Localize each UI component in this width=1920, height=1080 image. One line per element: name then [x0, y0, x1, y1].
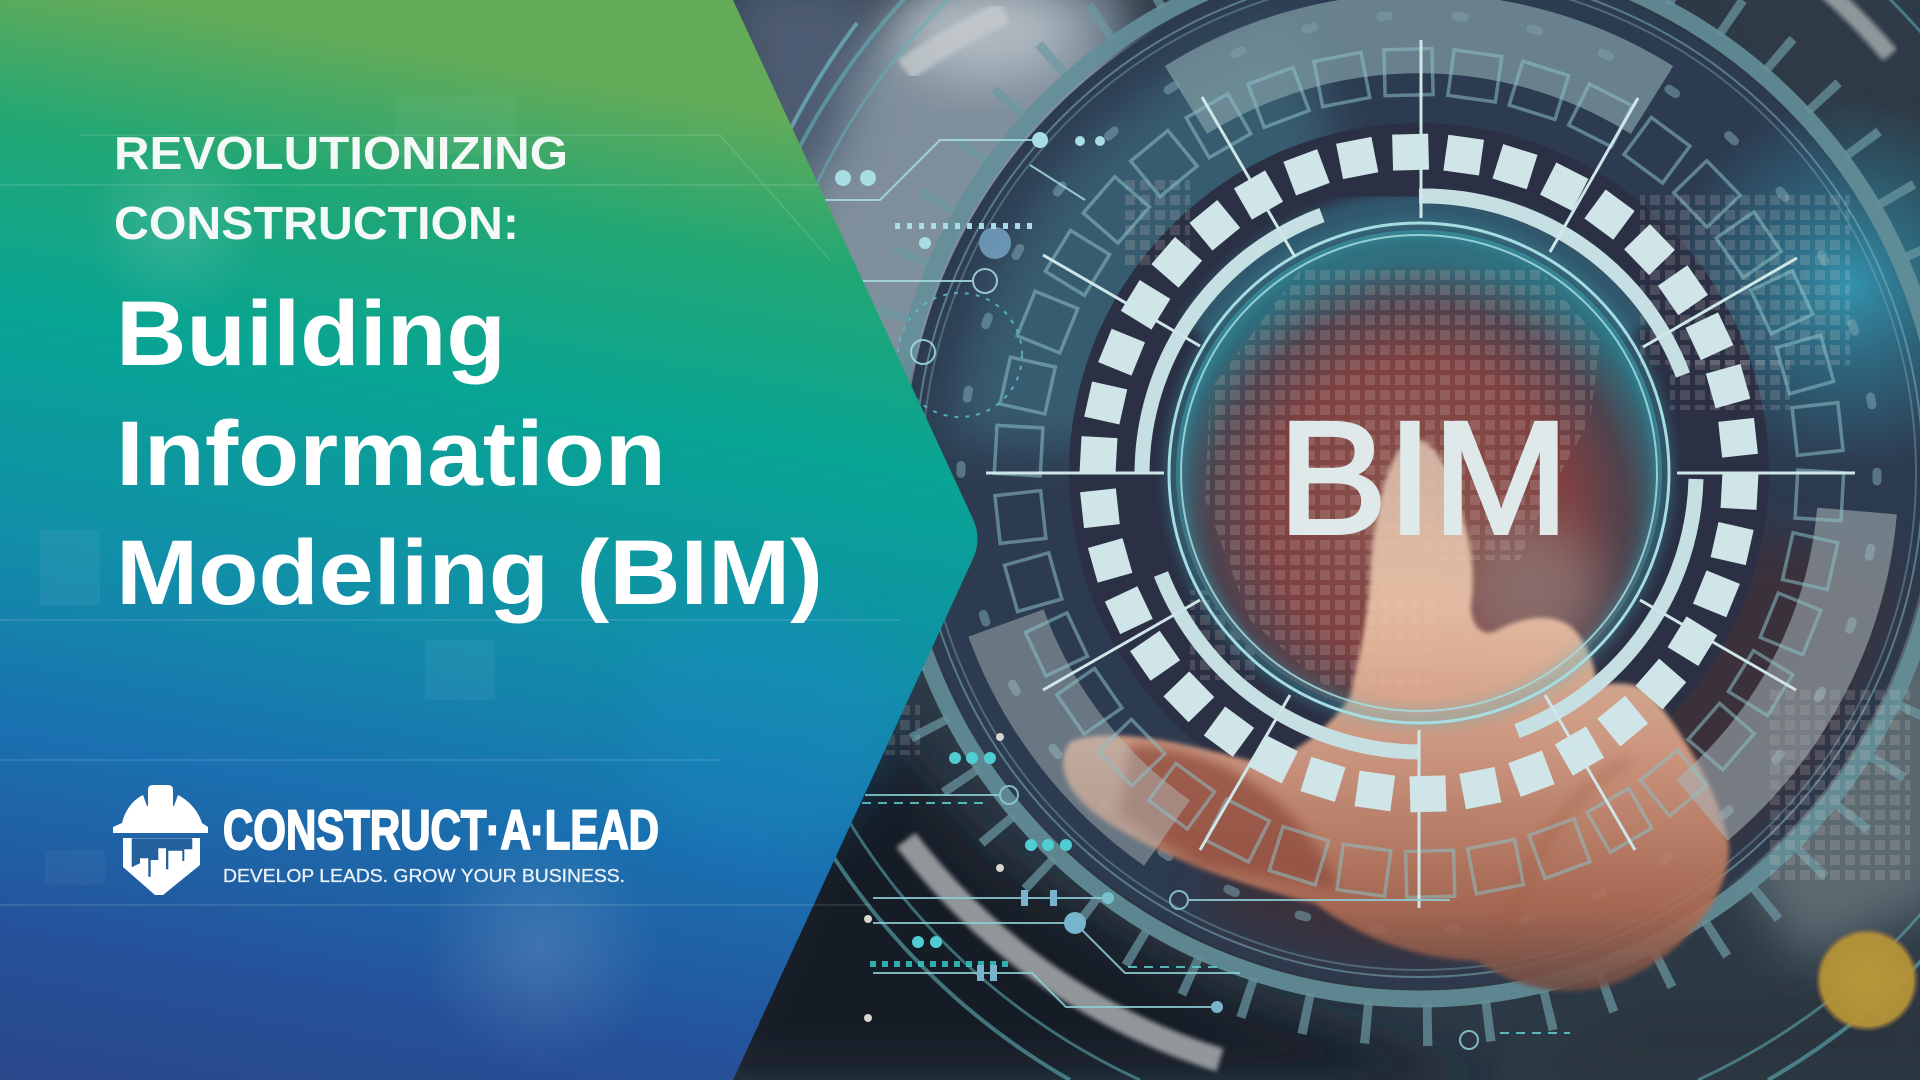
- teal dots and nodes lower left: [864, 733, 1223, 1022]
- north-west teal tint: [950, 20, 1419, 473]
- inner double ring: [1169, 223, 1669, 723]
- knuckle shading: [1500, 760, 1630, 960]
- circuit traces lower left: [862, 786, 1570, 1049]
- small heading: CONSTRUCTION:: [114, 197, 519, 249]
- main ring field: [904, 0, 1920, 988]
- logo tagline: DEVELOP LEADS. GROW YOUR BUSINESS.: [223, 866, 625, 886]
- radial spokes: [986, 40, 1855, 908]
- faint panel texture: [0, 95, 900, 1070]
- lens flare: [1815, 928, 1919, 1032]
- ring field warm lower part: [1200, 473, 1900, 961]
- square dial ring: [1080, 134, 1758, 812]
- pixel map fields outside disc: [870, 180, 1910, 880]
- circuit traces top left: [790, 23, 1085, 417]
- outer rings: [719, 0, 1920, 1080]
- glare at top: [895, 0, 1075, 80]
- top-right dark haze: [1700, 0, 1920, 140]
- translucent sector bands: [1006, 33, 1857, 833]
- top-left slate corner: [720, 0, 880, 170]
- lower-left dark zone: [700, 700, 1500, 1080]
- lower-right grey haze: [1700, 560, 1920, 960]
- BIM label: BIM: [1278, 388, 1569, 567]
- logo wordmark: CONSTRUCT·A·LEAD: [223, 798, 659, 861]
- outlined square ring: [994, 49, 1844, 898]
- small heading: [114, 127, 568, 249]
- left gradient panel with arrow tip: [0, 0, 978, 1080]
- teal glow, right: [1665, 100, 1920, 470]
- inner dark band: [1069, 123, 1769, 823]
- oval dot ring: [961, 15, 1877, 931]
- main title: [116, 283, 823, 624]
- main title: Modeling (BIM): [116, 522, 823, 624]
- Construct-A-Lead logo: [113, 785, 659, 895]
- bright sweep top right: [1815, 0, 1890, 55]
- hand pointing at BIM: [1063, 439, 1729, 991]
- icon: hard hat and skyline shield: [113, 785, 208, 895]
- bright sweep lower left: [906, 840, 1220, 1060]
- bright sweep top left: [905, 12, 1005, 70]
- main title: Building: [116, 283, 506, 385]
- pale dots top left: [835, 132, 1105, 259]
- main title: Information: [116, 403, 666, 505]
- segmented arcs: [1142, 196, 1696, 752]
- lower-left brown finger shading: [1120, 745, 1340, 890]
- top-left grey haze: [790, 0, 1130, 420]
- small heading: REVOLUTIONIZING: [114, 127, 568, 179]
- world-map disc: [1176, 209, 1662, 716]
